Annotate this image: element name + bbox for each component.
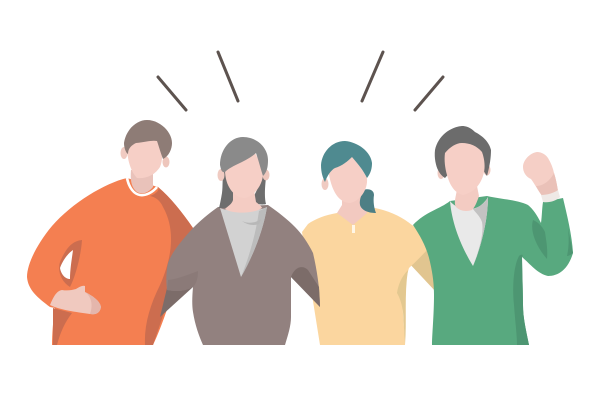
shirt (450, 197, 488, 266)
ear (322, 178, 328, 190)
back arm (160, 250, 200, 317)
collar (127, 178, 157, 195)
ponytail (360, 189, 376, 213)
person 3: yellow top (302, 141, 440, 345)
face (127, 135, 162, 178)
ears (120, 147, 128, 159)
collar slit (352, 225, 355, 233)
face (225, 153, 263, 198)
person 2: brown sweater (160, 137, 320, 345)
ears (218, 169, 224, 181)
face (328, 156, 367, 203)
cuff (541, 190, 560, 202)
sweater (166, 205, 320, 345)
neck (131, 170, 153, 193)
arm shadow (291, 267, 320, 307)
neck (455, 186, 479, 211)
top (302, 208, 427, 345)
hair (220, 137, 268, 176)
sweater shadow (145, 187, 193, 345)
hair (124, 120, 172, 159)
person 4: green cardigan (413, 126, 573, 345)
shadows (513, 255, 529, 345)
hair (321, 141, 372, 182)
fist (523, 152, 558, 197)
neck (225, 190, 262, 213)
shirt (220, 207, 267, 277)
arm gap (59, 240, 82, 287)
cardigan (413, 196, 573, 345)
arm shadow (397, 270, 408, 345)
ears (438, 167, 444, 179)
person 1: orange sweater (27, 120, 193, 345)
sweater (27, 178, 193, 345)
neck (337, 196, 367, 225)
emphasis lines (158, 52, 443, 110)
hair (435, 126, 491, 178)
face (445, 143, 485, 195)
hair back (219, 170, 267, 208)
hand (50, 286, 101, 314)
back arm (408, 225, 440, 292)
